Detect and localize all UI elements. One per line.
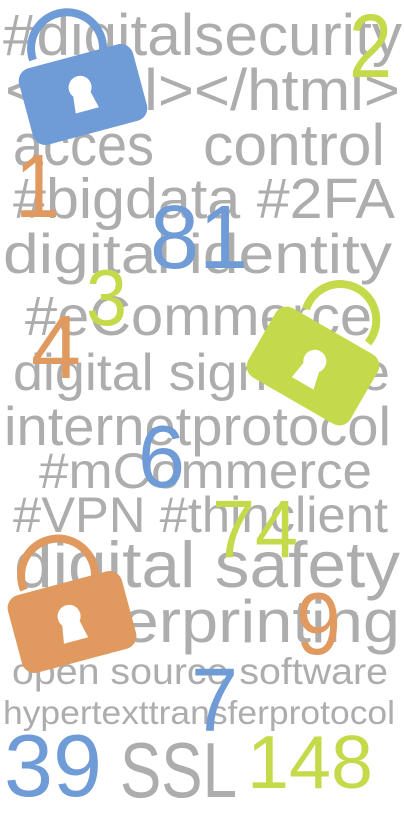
number 7: 7 <box>191 651 238 751</box>
word: open source software: open source software <box>12 651 388 692</box>
icon: green padlock <box>242 284 384 430</box>
word: digital identity: digital identity <box>3 222 392 285</box>
number 3: 3 <box>86 253 127 342</box>
number 81: 81 <box>150 188 248 288</box>
number 4: 4 <box>31 298 81 398</box>
icon: blue padlock <box>16 12 150 148</box>
icon: orange padlock <box>5 539 139 676</box>
word: #VPN #thinclient: #VPN #thinclient <box>13 487 388 543</box>
word: fingerprinting: fingerprinting <box>14 588 400 655</box>
word: html tags: <html></html> <box>5 58 400 123</box>
number 1: 1 <box>15 137 60 237</box>
number 148: 148 <box>247 720 373 804</box>
word: hypertexttransferprotocol: hypertexttransferprotocol <box>3 694 395 731</box>
number 39: 39 <box>4 716 102 815</box>
number 9: 9 <box>296 574 341 673</box>
word: #bigdata #2FA: #bigdata #2FA <box>13 167 395 231</box>
word: #digitalsecurity: #digitalsecurity <box>3 3 402 68</box>
number 6: 6 <box>138 407 185 506</box>
number 74: 74 <box>212 484 298 575</box>
word: control: control <box>203 113 385 178</box>
word: digital signature: digital signature <box>13 344 390 402</box>
word: digital safety: digital safety <box>14 528 401 601</box>
word: acces: acces <box>13 113 154 178</box>
word: SSL: SSL <box>120 726 237 814</box>
word: #eCommerce: #eCommerce <box>25 284 372 347</box>
word: #mCommerce: #mCommerce <box>39 443 372 499</box>
word: internetprotocol: internetprotocol <box>4 395 391 457</box>
